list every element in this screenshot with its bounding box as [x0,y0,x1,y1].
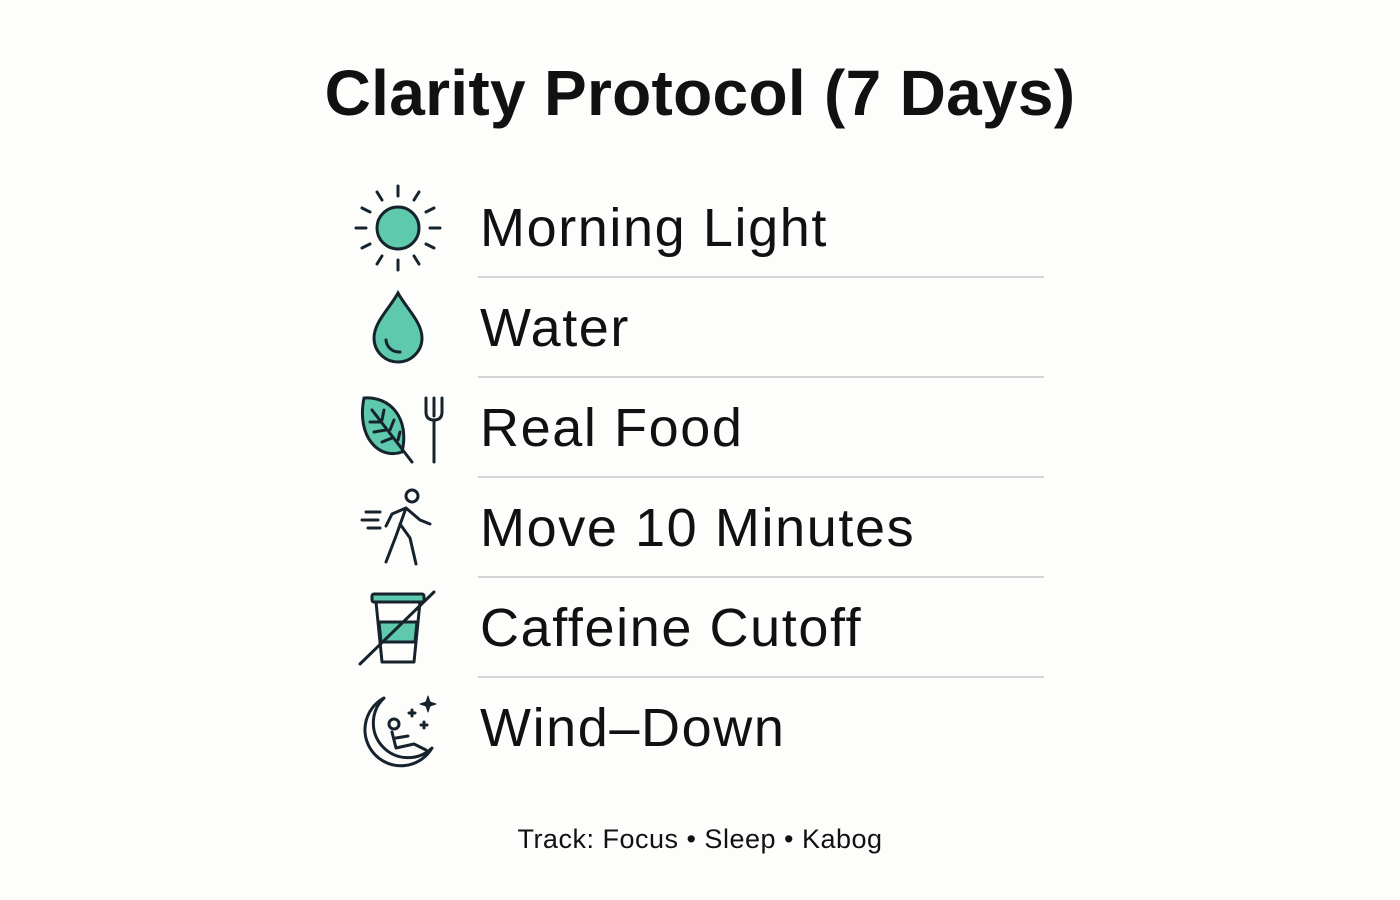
row: water [372,290,630,364]
row: real food [360,396,744,464]
text: Morning Light: Morning Light [480,198,828,258]
text: Water: Water [480,298,630,358]
row: morning light [354,184,828,272]
text: Caffeine Cutoff: Caffeine Cutoff [480,598,862,658]
text: Move 10 Minutes: Move 10 Minutes [480,498,915,558]
row: caffeine [358,590,862,666]
text: Real Food: Real Food [480,398,744,458]
icon: water drop [372,290,424,364]
icon: walking person [360,488,432,566]
row: wind-down [363,696,786,768]
icon: crossed-out cup [358,590,436,666]
icon: sun [354,184,442,272]
icon: moon with relaxing person [363,696,436,768]
footer: Track: Focus • Sleep • Kabog [517,824,883,854]
title: Clarity Protocol (7 Days) [325,57,1075,129]
text: Wind–Down: Wind–Down [480,698,786,758]
icon: leaf and fork [360,396,444,464]
row: move [360,488,915,566]
